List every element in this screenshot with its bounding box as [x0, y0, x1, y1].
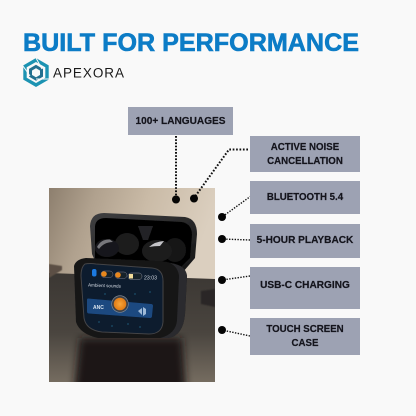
ANC label: ANC — [93, 305, 104, 311]
sound icon — [138, 307, 146, 316]
props at photo edges — [49, 264, 215, 307]
clock: 23:03 — [144, 276, 157, 282]
label: bluetooth — [250, 181, 360, 214]
label: playback — [250, 224, 360, 258]
label: active noise cancellation: CANCELLATION — [267, 156, 343, 167]
earbud case: body — [74, 258, 187, 338]
earbud: left — [95, 233, 139, 257]
label: usb-c charging — [250, 267, 360, 309]
inner hinge shape — [138, 226, 153, 240]
label: active noise cancellation: ACTIVE NOISE — [271, 142, 339, 153]
case reflection on table — [74, 338, 186, 390]
panel: product photo — [49, 136, 250, 382]
label: 100+ languages — [128, 107, 233, 135]
brand name: APEXORA — [53, 66, 124, 80]
screen stars — [98, 291, 151, 328]
connector: usb-c — [218, 276, 250, 284]
label: 100+ languages: 100+ LANGUAGES — [135, 116, 226, 127]
connector: active noise cancellation — [190, 150, 248, 202]
photo table surface — [49, 273, 215, 382]
status icon: left bud battery — [101, 271, 113, 278]
label: touch screen case: CASE — [292, 338, 318, 348]
status icon: bluetooth — [92, 269, 96, 276]
label: usb-c charging: USB-C CHARGING — [260, 280, 350, 291]
status icon: right bud battery — [115, 272, 127, 278]
label: playback: 5-HOUR PLAYBACK — [257, 235, 353, 246]
label: touch screen case — [250, 318, 360, 355]
status icon: case battery — [128, 273, 142, 280]
photo background wall — [49, 188, 215, 280]
touch screen — [81, 264, 163, 334]
screen label: ambient sounds: Ambient sounds — [88, 283, 122, 289]
connector: bluetooth — [218, 196, 251, 221]
earbud case: lid — [90, 213, 197, 272]
connector: touch screen — [218, 326, 250, 336]
connector: playback — [218, 235, 250, 243]
label: touch screen case: TOUCH SCREEN — [266, 324, 344, 335]
label: active noise cancellation — [250, 136, 360, 172]
orange control button — [112, 296, 128, 312]
ANC control bar — [87, 298, 153, 318]
title: BUILT FOR PERFORMANCE — [23, 29, 359, 57]
icon: hexagon logo mark — [23, 58, 49, 85]
logo: Apexora — [23, 58, 124, 87]
lid interior — [95, 218, 192, 270]
label: bluetooth: BLUETOOTH 5.4 — [267, 192, 343, 203]
connector: languages — [172, 136, 180, 204]
earbud: right — [142, 238, 186, 262]
